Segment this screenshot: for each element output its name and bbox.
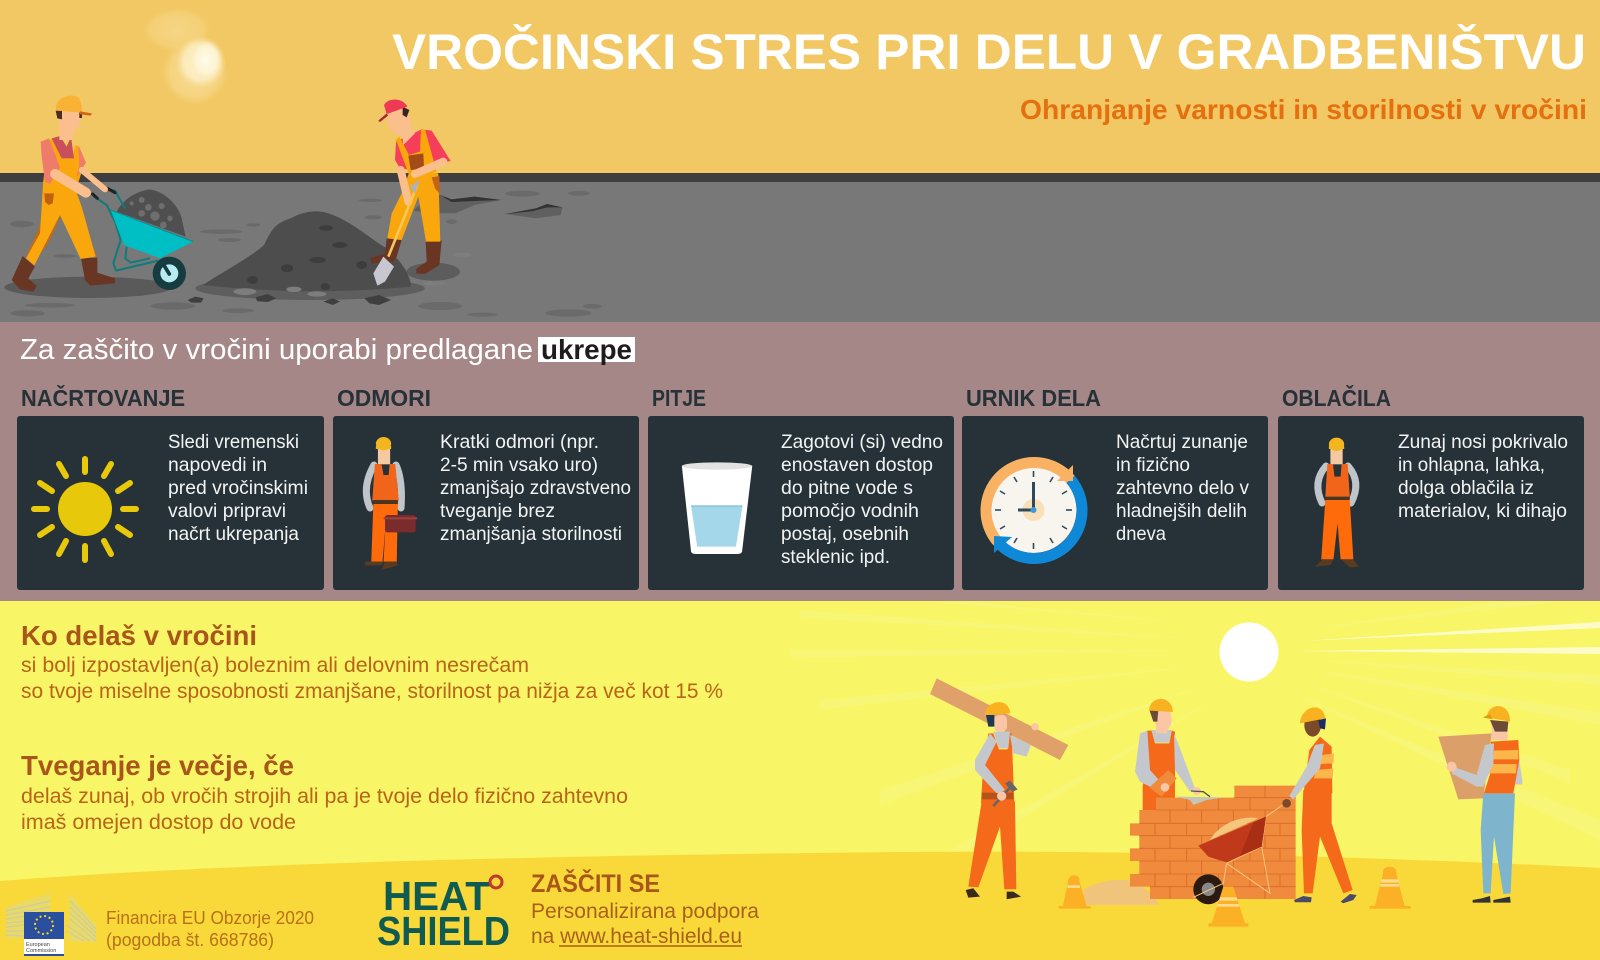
funding text: (pogodba št. 668786) [106, 930, 274, 950]
illustration: brick wall, bricklayer, wheelbarrow and worker [1130, 699, 1357, 927]
text block: working in heat: Ko delaš v vročini [21, 620, 257, 651]
text block: working in heat: si bolj izpostavljen(a) boleznim ali delovnim nesrečam [21, 654, 529, 677]
logo: European Commission: European [26, 942, 50, 948]
card text: planning [168, 431, 308, 545]
icon: worker in work clothes [1315, 438, 1359, 567]
text block: working in heat: so tvoje miselne sposobnosti zmanjšane, storilnost pa nižja za več kot 15 % [21, 680, 723, 703]
card text: schedule: in fizično [1116, 454, 1190, 476]
card text: planning: napovedi in [168, 454, 267, 476]
back leg [27, 203, 97, 262]
card text: planning: pred vročinskimi [168, 477, 308, 499]
card heading: OBLAČILA: OBLAČILA [1282, 384, 1391, 411]
shirt [41, 138, 60, 184]
hazy sun in header [143, 8, 228, 105]
panel: measures background [0, 322, 1600, 601]
card text: clothing [1398, 431, 1568, 522]
cracks in road [413, 195, 563, 218]
section heading: measures: Za zaščito v vročini uporabi predlagane [20, 334, 533, 366]
icon: sun [34, 459, 136, 560]
text block: higher risk: imaš omejen dostop do vode [21, 811, 296, 834]
card heading: PITJE: PITJE [652, 385, 706, 411]
logo: HEAT SHIELD: SHIELD [377, 908, 510, 954]
card text: planning: načrt ukrepanja [168, 523, 299, 545]
logo: HEAT SHIELD [377, 873, 510, 954]
illustration: worker with shovel [370, 99, 460, 286]
card text: drinking: steklenic ipd. [781, 546, 890, 568]
card text: schedule: hladnejših delih [1116, 500, 1247, 522]
card text: clothing: Zunaj nosi pokrivalo [1398, 431, 1568, 453]
overalls [26, 181, 96, 265]
icon: glass of water [682, 462, 752, 554]
text block: higher risk: Tveganje je večje, če [21, 750, 294, 781]
wheelbarrow [1193, 805, 1283, 904]
text block: higher risk: delaš zunaj, ob vročih strojih ali pa je tvoje delo fizično zahtevno [21, 785, 628, 808]
card text: drinking: pomočjo vodnih [781, 500, 919, 522]
illustration: worker reading plan [1438, 706, 1522, 903]
card heading: NAČRTOVANJE: NAČRTOVANJE [21, 384, 185, 411]
road spots [10, 191, 602, 317]
panel: header sky [0, 0, 1600, 174]
sun rays [790, 602, 1600, 850]
card text: schedule: dneva [1116, 523, 1166, 545]
sun [1220, 622, 1278, 682]
rubble pile [188, 211, 472, 305]
funding text [106, 908, 314, 950]
panel: lower yellow background [0, 601, 1600, 960]
card text: schedule [1116, 431, 1249, 545]
panel: planning card [17, 416, 324, 590]
text block: higher risk [21, 750, 628, 834]
card text: drinking: Zagotovi (si) vedno [781, 431, 943, 453]
call to action: Personalizirana podpora [531, 900, 759, 923]
illustration: sand pile and traffic cones [1058, 867, 1411, 909]
card text: clothing: materialov, ki dihajo [1398, 500, 1567, 522]
panel: drinking card [648, 416, 954, 590]
call to action [531, 868, 759, 948]
road edge band [0, 173, 1600, 182]
card text: breaks: tveganje brez [440, 500, 555, 522]
worker with wheelbarrow [1282, 707, 1357, 903]
card text: breaks: zmanjšanja storilnosti [440, 523, 622, 545]
card text: breaks [440, 431, 631, 545]
call to action: ZAŠČITI SE [531, 868, 660, 898]
icon: clock with arrows [986, 462, 1082, 559]
brick wall [1130, 786, 1296, 899]
card heading: ODMORI: ODMORI [337, 385, 431, 411]
title: VROČINSKI STRES PRI DELU V GRADBENIŠTVU [392, 23, 1586, 80]
road surface details: spots, cracks and rubble [10, 191, 602, 317]
panel: breaks card [333, 416, 639, 590]
logo: HEAT SHIELD: HEAT [383, 873, 490, 919]
ground hill [0, 852, 1600, 960]
icon: worker with toolbox [365, 437, 417, 570]
text block: working in heat [21, 620, 723, 703]
card text: drinking: enostaven dostop [781, 454, 933, 476]
subtitle: Ohranjanje varnosti in storilnosti v vročini [1020, 94, 1587, 125]
card text: breaks: zmanjšajo zdravstveno [440, 477, 631, 499]
bricklayer [1135, 699, 1201, 810]
card text: breaks: Kratki odmori (npr. [440, 431, 599, 453]
card text: drinking: postaj, osebnih [781, 523, 909, 545]
highlighted word: ukrepe: ukrepe [541, 334, 632, 365]
card text: schedule: zahtevno delo v [1116, 477, 1249, 499]
traffic cones [1058, 867, 1411, 909]
wheelbarrow [93, 187, 193, 290]
card text: drinking [781, 431, 943, 568]
card text: planning: Sledi vremenski [168, 431, 299, 453]
panel: road surface [0, 181, 1600, 322]
boots [12, 256, 37, 292]
traffic cone [1208, 887, 1248, 927]
card text: clothing: in ohlapna, lahka, [1398, 454, 1545, 476]
card heading: URNIK DELA: URNIK DELA [966, 385, 1101, 411]
card text: planning: valovi pripravi [168, 500, 286, 522]
card text: drinking: do pitne vode s [781, 477, 913, 499]
call to action: na www.heat-shield.eu [531, 925, 742, 948]
card text: clothing: dolga oblačila iz [1398, 477, 1534, 499]
card text: schedule: Načrtuj zunanje [1116, 431, 1248, 453]
illustration: worker pushing wheelbarrow [4, 96, 193, 298]
head and cap [59, 127, 73, 140]
sand pile [1083, 880, 1160, 905]
logo: European Commission: Commission [26, 948, 56, 954]
panel: clothing card [1278, 416, 1584, 590]
card text: breaks: 2-5 min vsako uro) [440, 454, 598, 476]
funding text: Financira EU Obzorje 2020 [106, 908, 314, 928]
panel: work schedule card [962, 416, 1268, 590]
illustration: worker carrying plank [930, 678, 1068, 899]
logo: European Commission [6, 893, 96, 956]
